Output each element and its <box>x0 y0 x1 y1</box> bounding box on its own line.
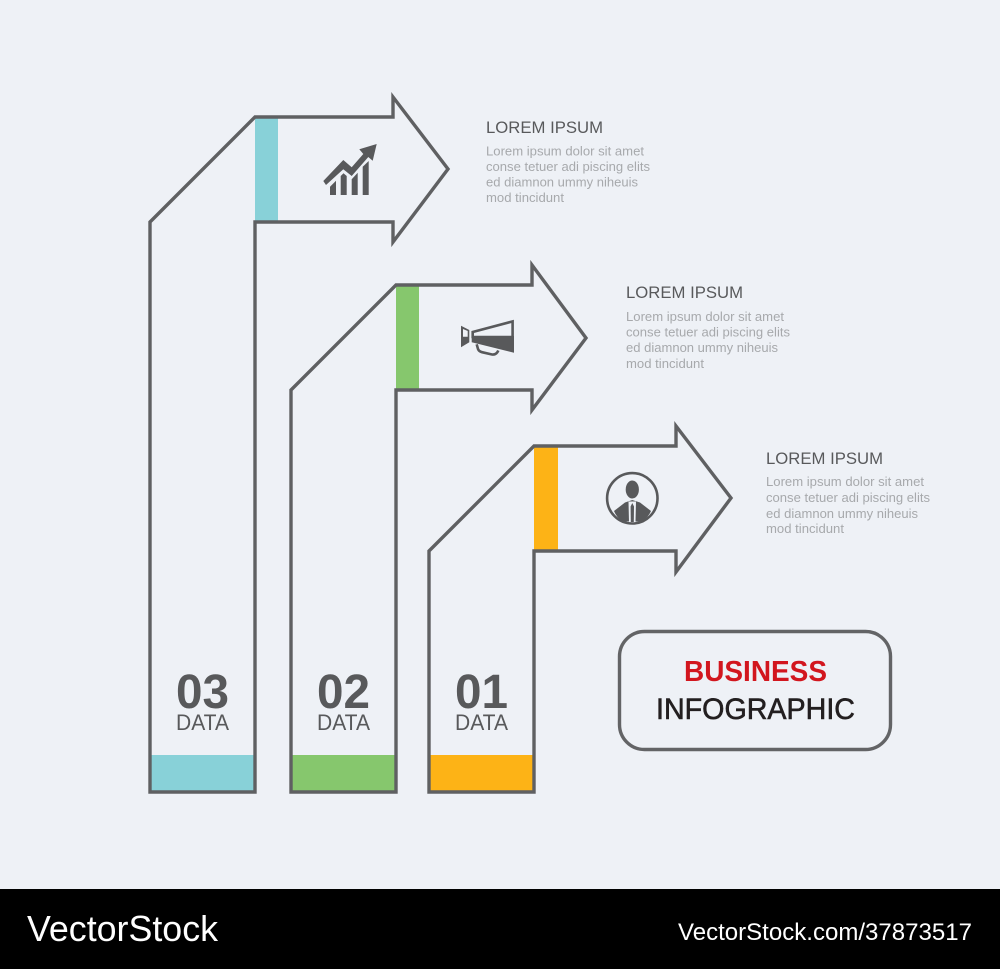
text block: arrow 02 description <box>626 283 791 371</box>
color base: arrow 03 <box>150 755 255 792</box>
label: data 02: DATA <box>317 710 370 735</box>
color tab: arrow 03 <box>255 117 278 222</box>
body text: lorem ipsum 03 <box>486 144 651 205</box>
color base: arrow 01 <box>429 755 534 792</box>
title: business: BUSINESS <box>684 656 827 688</box>
title frame <box>620 632 890 750</box>
body text: lorem ipsum 01: conse tetuer adi piscing elits <box>766 490 931 505</box>
body text: lorem ipsum 02: mod tincidunt <box>626 356 704 371</box>
footer image id: VectorStock.com/37873517 <box>678 919 972 946</box>
icon: businessman <box>607 473 658 524</box>
heading: lorem ipsum 02: LOREM IPSUM <box>626 283 743 302</box>
label: data 03: DATA <box>176 710 229 735</box>
footer background <box>0 889 1000 969</box>
body text: lorem ipsum 02: conse tetuer adi piscing elits <box>626 324 791 340</box>
panel: arrow 03 <box>150 97 448 792</box>
number 01: 01 <box>455 666 508 719</box>
panel: arrow 01 <box>429 426 731 792</box>
heading: lorem ipsum 03: LOREM IPSUM <box>486 118 603 137</box>
color tab: arrow 01 <box>534 446 558 551</box>
outline: arrow 02 <box>291 265 586 792</box>
panel: arrow 02 <box>291 265 586 792</box>
icon: megaphone <box>461 321 514 355</box>
text block: arrow 03 description <box>486 118 651 205</box>
text block: arrow 01 description <box>766 449 931 536</box>
color tab: arrow 02 <box>396 285 419 390</box>
color base: arrow 02 <box>291 755 396 792</box>
footer logo text: VectorStock <box>27 908 219 949</box>
number 03: 03 <box>176 666 229 719</box>
body text: lorem ipsum 02: ed diamnon ummy niheuis <box>626 340 778 355</box>
body text: lorem ipsum 01: Lorem ipsum dolor sit amet <box>766 474 924 489</box>
body text: lorem ipsum 02: Lorem ipsum dolor sit amet <box>626 309 784 324</box>
label: data 01: DATA <box>455 710 508 735</box>
body text: lorem ipsum 03: ed diamnon ummy niheuis <box>486 174 638 190</box>
body text: lorem ipsum 03: conse tetuer adi piscing elits <box>486 159 651 174</box>
body text: lorem ipsum 03: Lorem ipsum dolor sit amet <box>486 144 644 158</box>
icon: growth chart <box>323 144 377 195</box>
outline: arrow 01 <box>429 426 731 792</box>
body text: lorem ipsum 01: ed diamnon ummy niheuis <box>766 506 918 521</box>
body text: lorem ipsum 01 <box>766 474 931 536</box>
body text: lorem ipsum 01: mod tincidunt <box>766 521 844 536</box>
body text: lorem ipsum 02 <box>626 309 791 371</box>
heading: lorem ipsum 01: LOREM IPSUM <box>766 449 883 468</box>
outline: arrow 03 <box>150 97 448 792</box>
body text: lorem ipsum 03: mod tincidunt <box>486 190 564 205</box>
number 02: 02 <box>317 666 370 719</box>
title: infographic: INFOGRAPHIC <box>656 693 855 726</box>
title panel: business infographic <box>620 632 890 750</box>
footer bar <box>0 889 1000 969</box>
